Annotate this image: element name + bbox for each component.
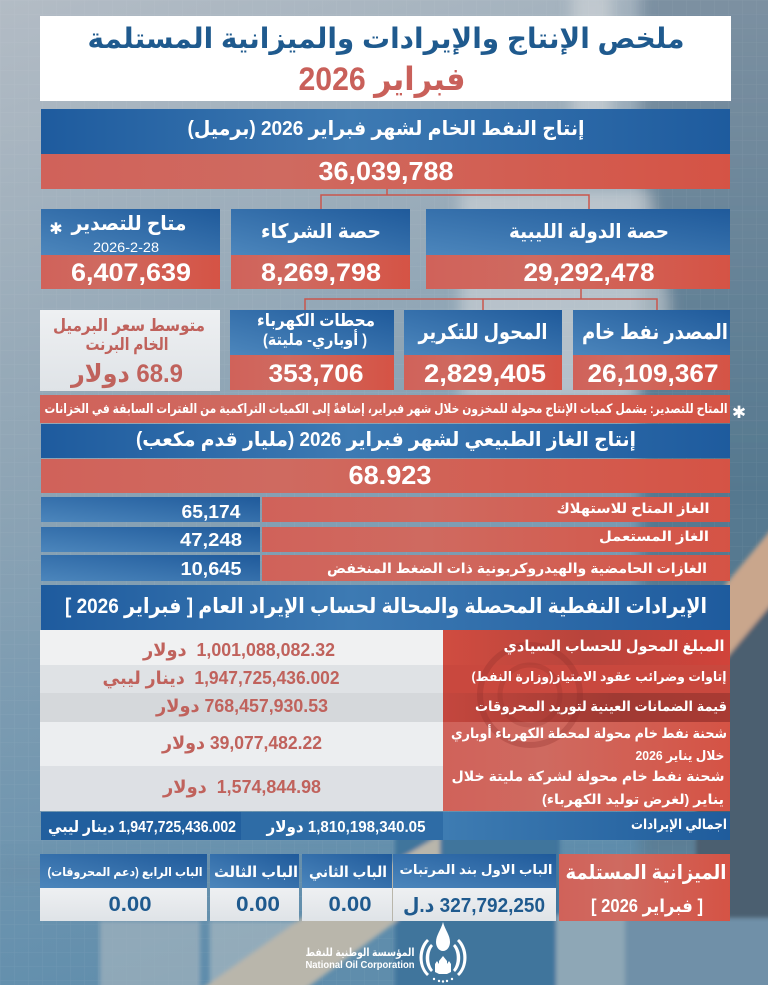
panel: Brent average price <box>40 310 220 391</box>
row: acid and low-pressure gases: 10,645 <box>180 559 242 579</box>
Mellitah shipment: يناير (لغرض توليد الكهرباء) <box>542 791 724 808</box>
date: 2026-2-28 <box>93 239 159 255</box>
panel: chapter one salaries: الباب الاول بند المرتبات <box>400 862 552 877</box>
label: حصة الشركاء <box>261 221 381 243</box>
total revenues: 1,810,198,340.05 دولار <box>266 819 426 836</box>
panel: Libya share <box>426 209 730 289</box>
value: 353,706 <box>268 360 364 388</box>
label line two: الخام البرنت <box>86 335 168 355</box>
panel: chapter two: الباب الثاني <box>309 864 387 881</box>
royalties and taxes <box>102 668 726 689</box>
panel: chapter two <box>302 854 392 921</box>
row: gas available for consumption: 65,174 <box>182 502 240 522</box>
label: حصة الدولة الليبية <box>509 221 669 243</box>
crude total: 36,039,788 <box>318 156 454 186</box>
panel: chapter two: 0.00 <box>328 893 372 916</box>
Ubari shipment <box>161 724 727 763</box>
title panel <box>40 16 731 101</box>
row: acid and low-pressure gases <box>41 555 730 581</box>
panel: received budget title: الميزانية المستلمة <box>566 862 726 884</box>
fuel guarantees: قيمة الضمانات العينية لتوريد المحروقات <box>475 698 727 715</box>
panel: available for export <box>41 209 220 289</box>
fuel guarantees <box>155 696 727 717</box>
value: 29,292,478 <box>524 259 655 287</box>
icon: NOC logo <box>420 922 466 983</box>
title date: فبراير 2026 <box>298 61 466 98</box>
royalties and taxes: 1,947,725,436.002 دينار ليبي <box>102 668 340 689</box>
revenues heading: الإيرادات النفطية المحصلة والمحالة لحساب الإيراد العام [ فبراير 2026 ] <box>65 595 707 618</box>
panel: crude oil production <box>41 109 730 189</box>
panel: chapter four fuel subsidy: 0.00 <box>108 893 152 916</box>
row: acid and low-pressure gases: الغازات الحامضية والهيدروكربونية ذات الضغط المنخفض <box>327 560 707 577</box>
Ubari shipment: خلال يناير 2026 <box>636 748 724 763</box>
crude heading: إنتاج النفط الخام لشهر فبراير 2026 (برميل) <box>188 118 584 140</box>
panel: power stations <box>230 310 394 390</box>
row: gas used: 47,248 <box>180 530 242 550</box>
row: gas available for consumption: الغاز المتاح للاستهلاك <box>556 500 710 517</box>
panel: oil revenues <box>40 585 730 840</box>
asterisk: ✱ <box>49 219 63 238</box>
label: المحول للتكرير <box>418 321 548 344</box>
Ubari shipment: شحنة نفط خام محولة لمحطة الكهرباء أوباري <box>451 724 727 743</box>
logo text <box>306 947 414 971</box>
connector: total to shares <box>321 189 589 209</box>
panel: chapter four fuel subsidy <box>40 854 207 921</box>
panel: transferred to refining <box>404 310 562 390</box>
revenue rows values background <box>40 630 443 811</box>
panel: chapter one salaries <box>393 854 556 921</box>
panel: received budget title: [ فبراير 2026 ] <box>591 896 703 917</box>
sovereign account: المبلغ المحول للحساب السيادي <box>504 638 724 656</box>
label line one: متوسط سعر البرميل <box>53 316 205 336</box>
gas heading: إنتاج الغاز الطبيعي لشهر فبراير 2026 (مليار قدم مكعب) <box>136 429 636 452</box>
label: متاح للتصدير <box>71 213 186 235</box>
Mellitah shipment: شحنة نفط خام محولة لشركة مليتة خلال <box>452 768 724 785</box>
revenue rows labels background <box>443 630 730 811</box>
panel: partners share <box>231 209 410 289</box>
panel: crude exported <box>573 310 730 390</box>
panel: chapter three: الباب الثالث <box>214 864 298 881</box>
panel: chapter four fuel subsidy: الباب الرابع (دعم المحروقات) <box>48 865 202 880</box>
panel: natural gas production <box>41 424 730 493</box>
value: 26,109,367 <box>588 360 718 388</box>
title line: ملخص الإنتاج والإيرادات والميزانية المستلمة <box>88 23 684 56</box>
total revenues: اجمالي الإيرادات <box>631 816 727 833</box>
Mellitah shipment <box>162 768 724 808</box>
value: 6,407,639 <box>71 259 191 287</box>
icon: footnote asterisk: ✱ <box>732 403 746 423</box>
row: gas available for consumption <box>41 497 730 522</box>
royalties and taxes: إتاوات وضرائب عقود الامتياز(وزارة النفط) <box>472 669 726 684</box>
Ubari shipment: 39,077,482.22 دولار <box>161 733 322 754</box>
total revenues <box>41 812 730 840</box>
connector: Libya share to uses <box>305 289 657 310</box>
logo text: المؤسسة الوطنية للنفط <box>306 947 414 959</box>
panel: chapter one salaries: 327,792,250 د.ل <box>403 895 545 917</box>
sovereign account <box>142 638 724 661</box>
value: 2,829,405 <box>424 360 546 388</box>
logo text: National Oil Corporation <box>306 960 414 971</box>
footnote <box>40 395 730 423</box>
total revenues: 1,947,725,436.002 دينار ليبي <box>48 819 236 837</box>
panel: received budget title <box>559 854 730 921</box>
value: 68.9 دولار <box>69 360 183 389</box>
label line one: محطات الكهرباء <box>257 311 375 331</box>
label line two: ( أوباري- مليتة) <box>263 329 367 350</box>
panel: chapter three: 0.00 <box>236 893 280 916</box>
label: المصدر نفط خام <box>582 321 728 344</box>
Mellitah shipment: 1,574,844.98 دولار <box>162 777 321 798</box>
fuel guarantees: 768,457,930.53 دولار <box>155 696 328 717</box>
value: 8,269,798 <box>261 259 381 287</box>
row: gas used: الغاز المستعمل <box>599 528 709 544</box>
row: gas used <box>41 527 730 552</box>
panel: chapter three <box>210 854 299 921</box>
gas total: 68.923 <box>348 460 432 490</box>
sovereign account: 1,001,088,082.32 دولار <box>142 640 335 661</box>
